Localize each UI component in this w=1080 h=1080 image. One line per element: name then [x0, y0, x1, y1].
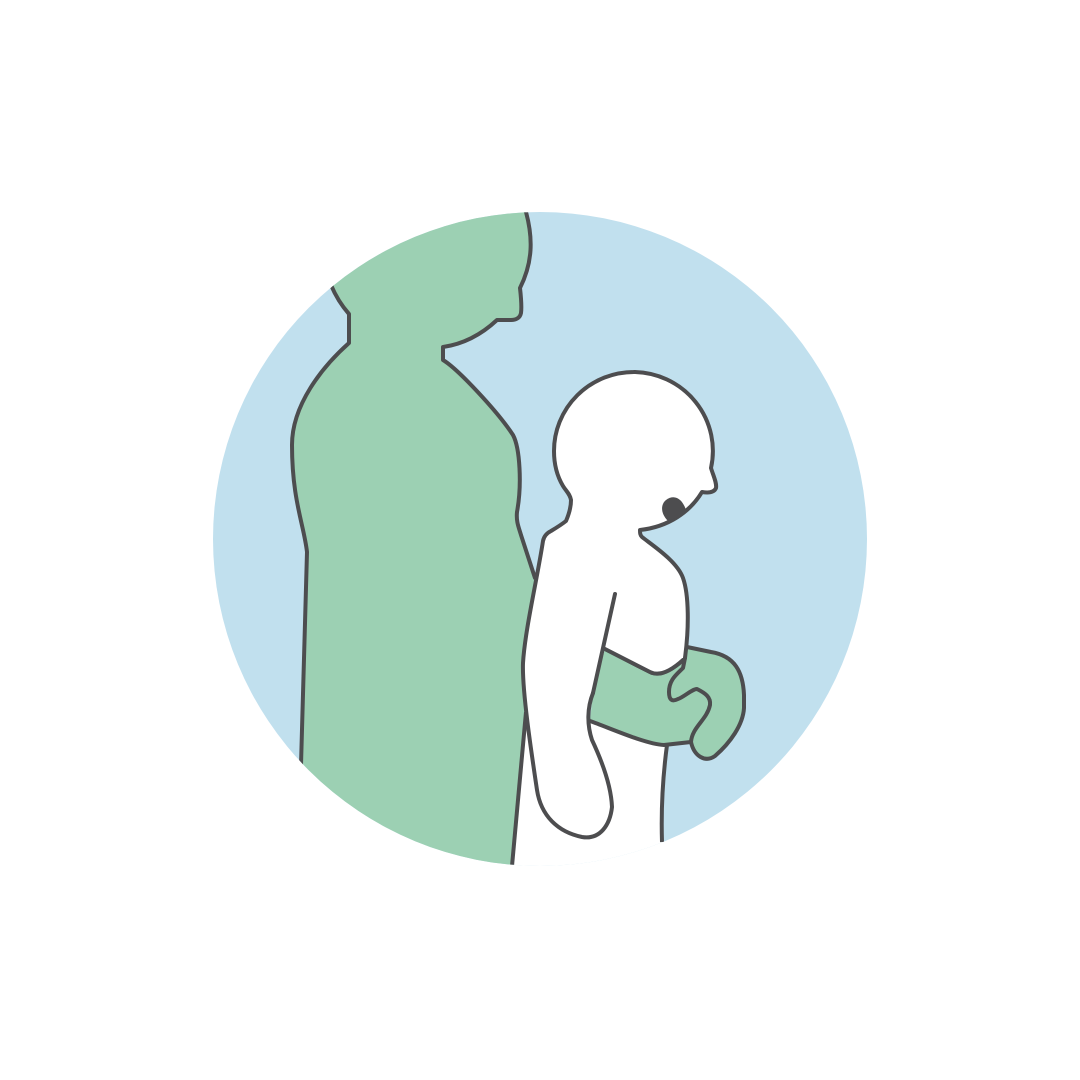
child body and head — [523, 372, 716, 837]
adult arm — [590, 647, 744, 759]
icon: nursing breast detail — [662, 497, 686, 521]
adult silhouette — [290, 205, 667, 880]
icon: adult hand on child — [669, 658, 710, 742]
illustration: adult holding child — [213, 212, 867, 866]
child legs — [514, 723, 665, 866]
child arm line — [593, 594, 615, 693]
background circle — [213, 212, 867, 866]
